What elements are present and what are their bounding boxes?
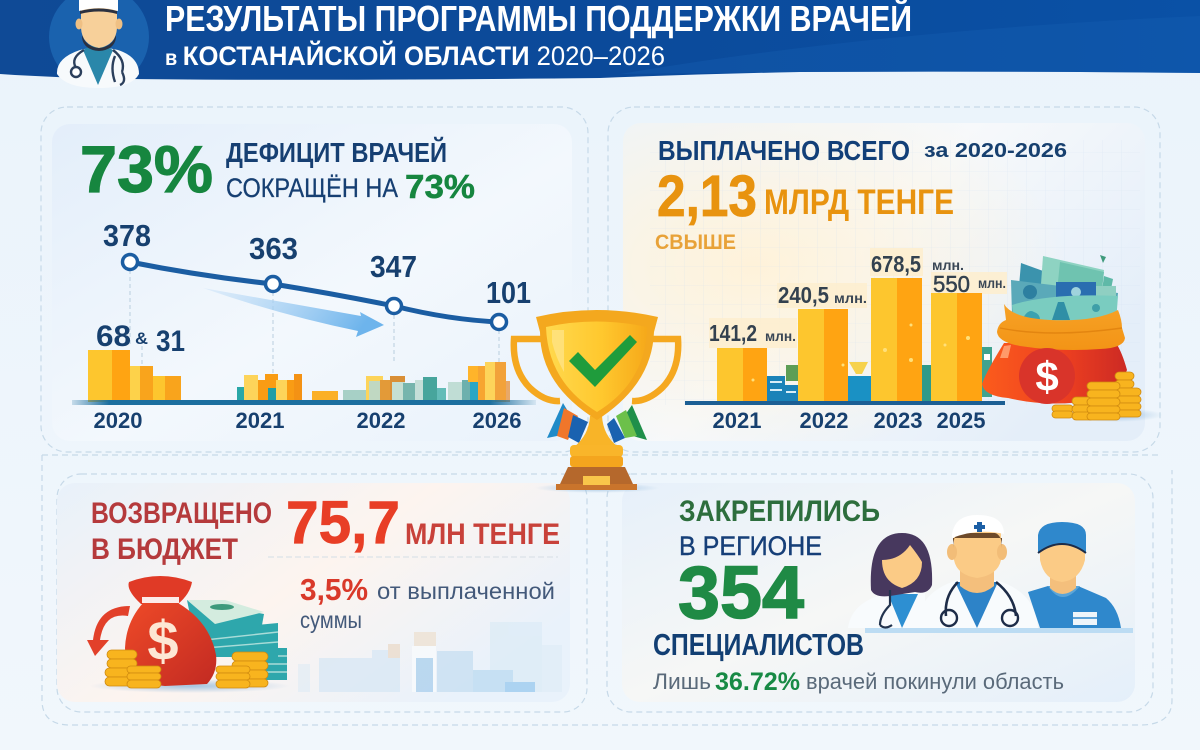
axis bbox=[72, 400, 536, 405]
icon: money bag with coins bbox=[982, 255, 1163, 422]
specialists label: СПЕЦИАЛИСТОВ bbox=[653, 627, 864, 662]
ribbons bbox=[547, 403, 572, 438]
bar chart: млн. bbox=[932, 257, 964, 273]
return arrow bbox=[87, 606, 130, 656]
bar chart: 240,5 bbox=[778, 282, 829, 308]
cup bbox=[536, 310, 658, 420]
bars and buildings bbox=[88, 350, 510, 402]
panel: returned to budget bbox=[57, 483, 570, 702]
faint city bbox=[298, 622, 562, 692]
stem and base bbox=[574, 416, 618, 447]
bar chart: млн. bbox=[978, 275, 1006, 291]
year labels: 2022 bbox=[800, 408, 848, 433]
heading: ДЕФИЦИТ ВРАЧЕЙ bbox=[226, 136, 447, 168]
coin stacks bbox=[105, 650, 268, 688]
subheading: СОКРАЩЁН НА bbox=[226, 173, 398, 203]
total unit: МЛРД ТЕНГЕ bbox=[764, 183, 954, 222]
heading: ВОЗВРАЩЕНО bbox=[91, 497, 272, 530]
line chart: 347 bbox=[370, 249, 417, 284]
bar chart: млн. bbox=[765, 328, 796, 344]
year labels: 2021 bbox=[713, 408, 761, 433]
icon: doctor avatar bbox=[49, 0, 149, 88]
bar chart: 550 bbox=[933, 271, 970, 297]
dashed frames bbox=[41, 107, 1172, 725]
banknotes bbox=[187, 600, 287, 680]
big number: 354 bbox=[678, 551, 804, 634]
year labels bbox=[94, 408, 521, 433]
note text: Лишь bbox=[653, 669, 711, 694]
returned unit: МЛН ТЕНГЕ bbox=[405, 518, 560, 551]
doctor: man with cap bbox=[916, 515, 1038, 628]
big percentage: 73% bbox=[80, 132, 213, 206]
heading: ЗАКРЕПИЛИСЬ bbox=[679, 495, 880, 528]
share text: от выплаченной bbox=[377, 578, 555, 604]
count labels 2020: & bbox=[135, 329, 148, 348]
header band bbox=[0, 0, 1200, 80]
year labels: 2022 bbox=[357, 408, 405, 433]
total value: 2,13 bbox=[657, 164, 757, 229]
bar chart bbox=[709, 248, 1007, 402]
panel: retained specialists bbox=[622, 483, 1135, 702]
icon: money bag with coins: $ bbox=[1035, 353, 1059, 400]
line chart: 101 bbox=[486, 275, 531, 310]
illustration: three doctors bbox=[848, 515, 1133, 633]
year labels: 2023 bbox=[874, 408, 922, 433]
count labels 2020: 31 bbox=[156, 325, 185, 358]
icon: money bag with arrow bbox=[87, 576, 290, 693]
year labels bbox=[713, 408, 985, 433]
count labels 2020 bbox=[96, 320, 185, 358]
coin stacks bbox=[1052, 372, 1141, 420]
year labels: 2020 bbox=[94, 408, 142, 433]
note text end: врачей покинули область bbox=[806, 669, 1064, 694]
subheading value: 73% bbox=[405, 168, 475, 205]
period: за 2020-2026 bbox=[924, 140, 1067, 162]
line chart: 363 bbox=[249, 231, 298, 266]
doctor: surgeon bbox=[1028, 522, 1121, 628]
icon: money bag with arrow: $ bbox=[147, 609, 179, 672]
town behind bars bbox=[767, 347, 992, 402]
count labels 2020: 68 bbox=[96, 320, 131, 353]
icon: trophy bbox=[514, 310, 678, 493]
bar chart: 678,5 bbox=[871, 251, 921, 277]
decline arrow bbox=[203, 288, 384, 337]
axis bbox=[685, 401, 1005, 405]
panel: deficit of doctors bbox=[52, 124, 572, 441]
bar chart: млн. bbox=[834, 290, 867, 306]
year labels: 2026 bbox=[473, 408, 521, 433]
subheading: В РЕГИОНЕ bbox=[679, 531, 822, 561]
check mark bbox=[569, 335, 637, 387]
heading: ВЫПЛАЧЕНО ВСЕГО bbox=[658, 135, 910, 166]
returned value: 75,7 bbox=[286, 489, 400, 556]
share value: 3,5% bbox=[300, 572, 368, 607]
panel: returned to budget: В БЮДЖЕТ bbox=[91, 533, 238, 566]
banknotes bbox=[1011, 255, 1118, 322]
doctor: woman bbox=[848, 533, 932, 628]
year labels: 2025 bbox=[937, 408, 985, 433]
panel: total paid bbox=[623, 123, 1163, 441]
handles bbox=[514, 339, 560, 401]
line chart: 378 bbox=[103, 218, 151, 253]
panel: returned to budget: суммы bbox=[300, 607, 362, 633]
over label: СВЫШЕ bbox=[655, 231, 736, 254]
bar chart: 141,2 bbox=[709, 320, 757, 346]
year labels: 2021 bbox=[236, 408, 284, 433]
note value: 36.72% bbox=[715, 668, 800, 696]
line chart bbox=[103, 218, 531, 376]
title line 2: в КОСТАНАЙСКОЙ ОБЛАСТИ 2020–2026 bbox=[165, 40, 665, 71]
